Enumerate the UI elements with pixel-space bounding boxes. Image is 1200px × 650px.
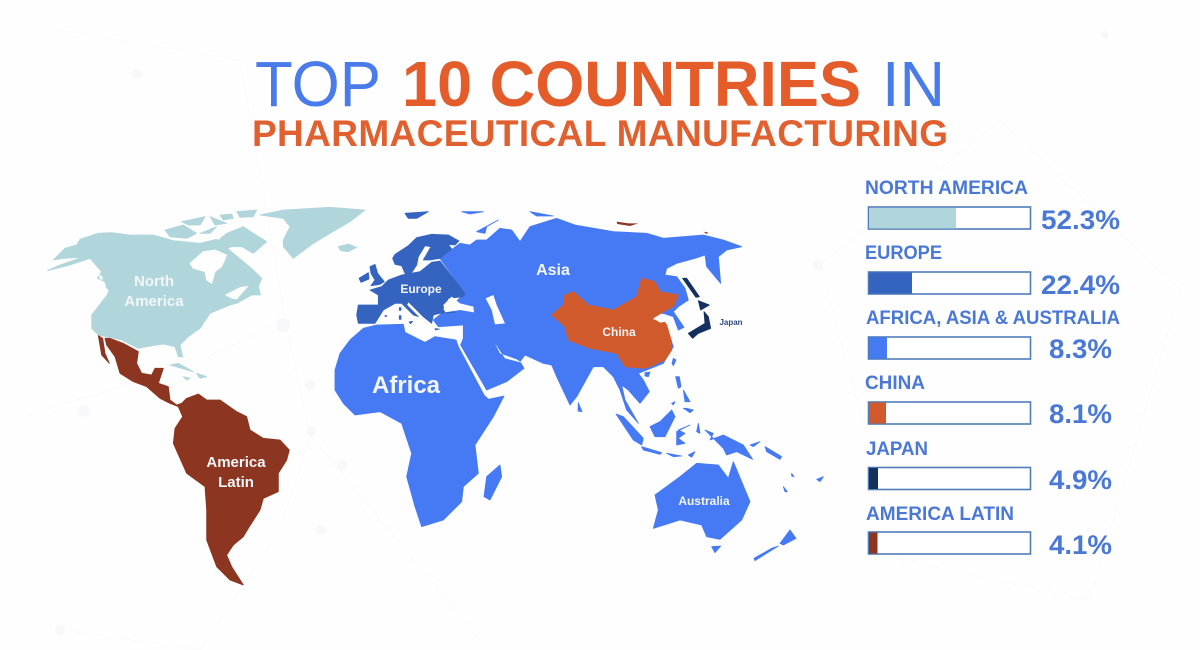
map: americas — [47, 207, 365, 585]
title line 1 — [255, 48, 945, 120]
label: america latin: America — [206, 454, 266, 471]
title line 1: TOP — [255, 48, 381, 120]
label: china: China — [602, 325, 636, 339]
map labels — [124, 262, 743, 508]
region: america latin — [98, 336, 289, 585]
legend row: america latin — [866, 504, 1112, 560]
legend — [865, 178, 1120, 560]
region: japan — [683, 278, 711, 338]
legend row: africa, asia and australia: AFRICA, ASIA & AUSTRALIA — [866, 308, 1120, 329]
world map — [47, 207, 823, 585]
region: africa — [335, 324, 504, 527]
label: africa: Africa — [372, 372, 441, 399]
label: north america: America — [124, 293, 184, 310]
legend row: america latin: AMERICA LATIN — [866, 504, 1014, 525]
legend row: north america — [865, 178, 1120, 235]
legend row: japan — [866, 439, 1112, 495]
region: europe — [357, 212, 465, 330]
legend row: europe — [865, 243, 1120, 300]
label: japan: Japan — [719, 318, 743, 327]
legend row: japan: JAPAN — [866, 439, 928, 460]
inland seas — [443, 295, 522, 363]
legend row: china: CHINA — [865, 373, 925, 394]
label: europe: Europe — [400, 282, 442, 296]
legend row: china — [865, 373, 1112, 429]
legend row: north america: NORTH AMERICA — [865, 178, 1028, 199]
region: asia — [433, 218, 742, 423]
label: america latin: Latin — [218, 474, 254, 491]
legend row: africa, asia and australia — [866, 308, 1120, 364]
bohai sea — [653, 313, 667, 323]
title line 2: PHARMACEUTICAL MANUFACTURING — [252, 113, 948, 154]
legend row: america latin: 4.1% — [1049, 530, 1112, 560]
region: china — [552, 278, 678, 368]
region: asia islands and australia — [462, 212, 823, 561]
title line 1: 10 COUNTRIES — [402, 48, 861, 120]
label: australia: Australia — [678, 494, 730, 508]
legend row: europe: EUROPE — [865, 243, 942, 264]
title — [252, 48, 948, 154]
legend row: china: 8.1% — [1049, 399, 1112, 429]
arctic islands coloured as america latin — [617, 222, 708, 234]
label: north america: North — [134, 273, 174, 290]
legend row: japan: 4.9% — [1049, 465, 1112, 495]
map: eastern hemisphere — [335, 212, 823, 561]
legend row: europe: 22.4% — [1041, 270, 1120, 300]
legend row: north america: 52.3% — [1041, 205, 1120, 235]
label: asia: Asia — [536, 262, 570, 279]
region: north america — [47, 210, 267, 357]
title line 1: IN — [882, 48, 945, 120]
legend row: africa, asia and australia: 8.3% — [1049, 334, 1112, 364]
